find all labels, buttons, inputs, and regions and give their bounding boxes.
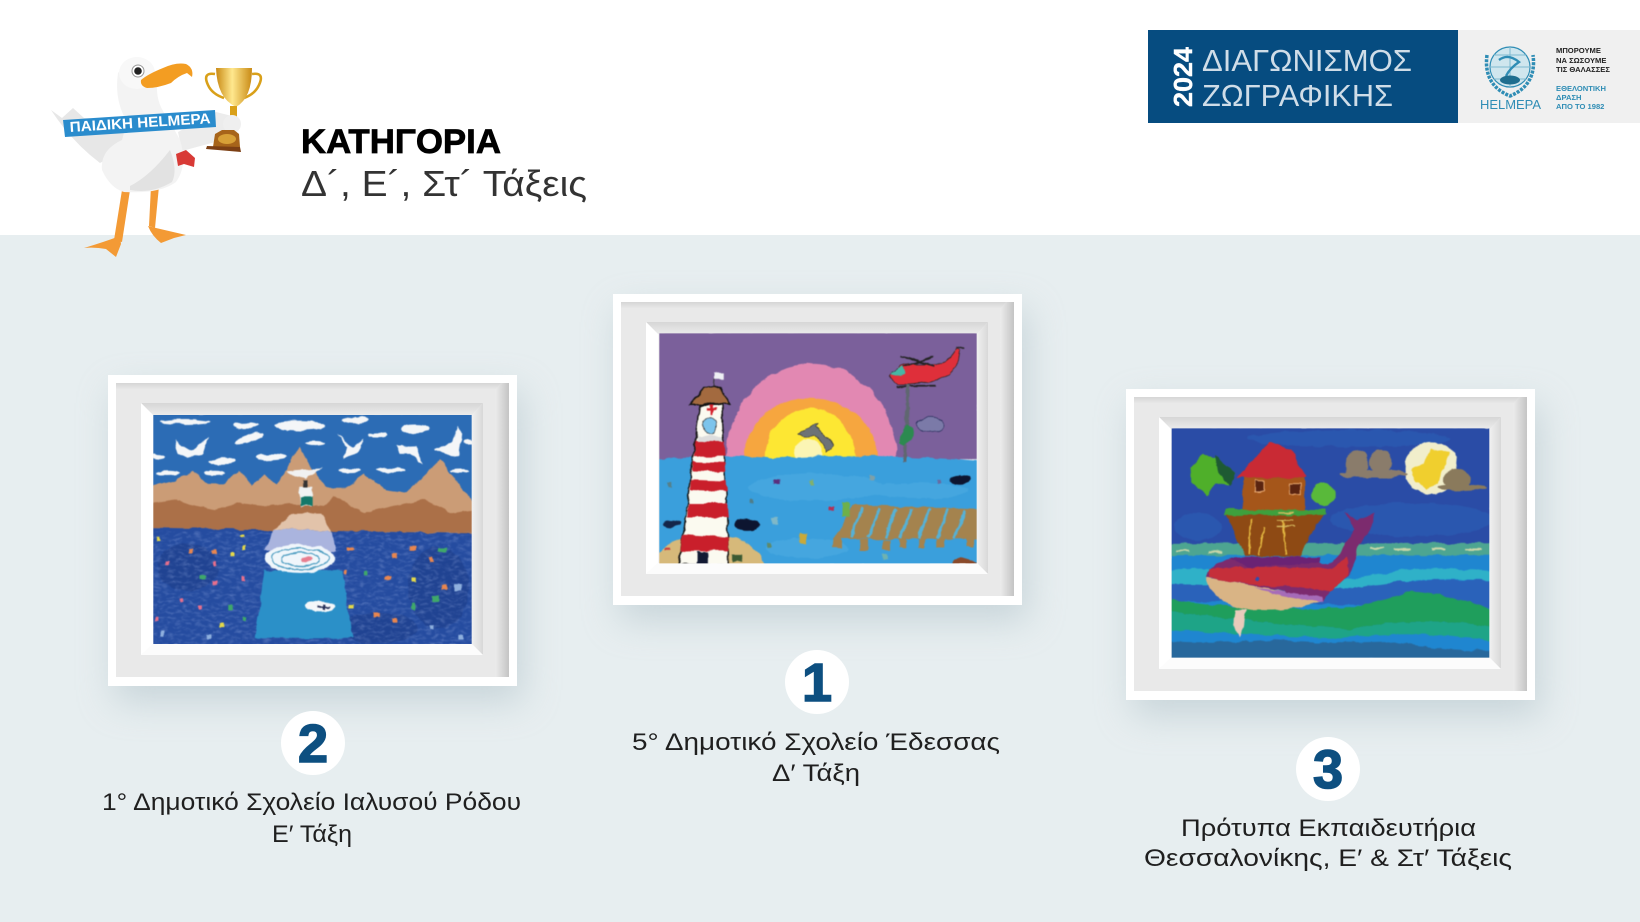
tagline: ΑΠΟ ΤΟ 1982: [1556, 102, 1604, 111]
logo block: [1148, 30, 1640, 123]
panel: first place artwork: [613, 294, 1028, 621]
lower background panel: [0, 235, 1640, 922]
mascot: seagull with trophy: [51, 57, 261, 257]
contest badge: 2024: [1168, 46, 1198, 107]
contest badge: ΔΙΑΓΩΝΙΣΜΟΣ: [1202, 43, 1412, 78]
school caption: Δ′ Τάξη: [772, 760, 860, 787]
badge number 2: 2: [298, 714, 328, 774]
oil slicks and litter: [662, 475, 979, 565]
body: [102, 58, 183, 192]
tagline: ΔΡΑΣΗ: [1556, 93, 1581, 102]
badge number 3: 3: [1313, 740, 1343, 800]
panel: second place artwork: [108, 375, 523, 702]
tagline: ΤΙΣ ΘΑΛΑΣΣΕΣ: [1556, 65, 1610, 74]
school caption: 1° Δημοτικό Σχολείο Ιαλυσού Ρόδου: [102, 789, 521, 816]
subtitle: classes: Δ´, Ε´, Στ´ Τάξεις: [301, 163, 587, 204]
tagline: [1556, 46, 1610, 111]
badge number 2: [281, 711, 345, 775]
red ribbon: [176, 150, 195, 167]
beak: [141, 64, 192, 88]
icon: HELMEPA emblem: [1486, 47, 1534, 96]
sand: [653, 535, 764, 602]
island: [1225, 511, 1327, 557]
tagline: ΜΠΟΡΟΥΜΕ: [1556, 46, 1601, 55]
head: [119, 57, 155, 89]
badge number 3: [1296, 737, 1360, 801]
legs and feet: [84, 186, 186, 257]
painting: iceberg and gulls: [148, 413, 474, 646]
helicopter: [890, 349, 960, 384]
school caption: Πρότυπα Εκπαιδευτήρια: [1181, 815, 1476, 842]
badge number 1: [785, 650, 849, 714]
tagline: ΕΘΕΛΟΝΤΙΚΗ: [1556, 84, 1606, 93]
lighthouse: [679, 405, 729, 565]
award 3: badge and school: [1144, 737, 1512, 872]
pier: [834, 505, 979, 540]
school caption: Θεσσαλονίκης, Ε′ & Στ′ Τάξεις: [1144, 845, 1512, 872]
school caption: 5° Δημοτικό Σχολείο Έδεσσας: [632, 729, 1000, 756]
school caption: [1144, 815, 1512, 872]
banner: ΠΑΙΔΙΚΗ HELMEPA: [69, 111, 212, 136]
right arm: [178, 112, 241, 151]
award 2: badge and school: [102, 711, 521, 848]
school caption: Ε′ Τάξη: [272, 821, 352, 848]
HELMEPA panel: [1458, 30, 1640, 123]
tree house: [1243, 478, 1304, 510]
badge number 1: 1: [802, 653, 832, 713]
trophy: [206, 68, 261, 152]
trees: [1191, 455, 1235, 495]
HELMEPA panel: HELMEPA: [1480, 97, 1541, 112]
tagline: ΝΑ ΣΩΣΟΥΜΕ: [1556, 56, 1606, 65]
school caption: [102, 789, 521, 848]
panel: third place artwork: [1126, 389, 1541, 716]
left wing: [51, 108, 130, 163]
school caption: [632, 729, 1000, 787]
dolphin: [798, 424, 834, 452]
painting: whale carrying a tree house: [1169, 427, 1492, 660]
marine litter dots: [156, 534, 464, 640]
contest badge: ΖΩΓΡΑΦΙΚΗΣ: [1202, 78, 1393, 113]
contest badge: [1148, 30, 1458, 123]
heading: category: ΚΑΤΗΓΟΡΙΑ: [301, 123, 501, 161]
clouds: [1340, 449, 1408, 478]
painting: lighthouse and sunset: [659, 333, 977, 564]
award 1: badge and school: [632, 650, 1000, 787]
whale: [1205, 577, 1325, 610]
moon: [1405, 442, 1458, 495]
heading: category: [301, 123, 587, 204]
